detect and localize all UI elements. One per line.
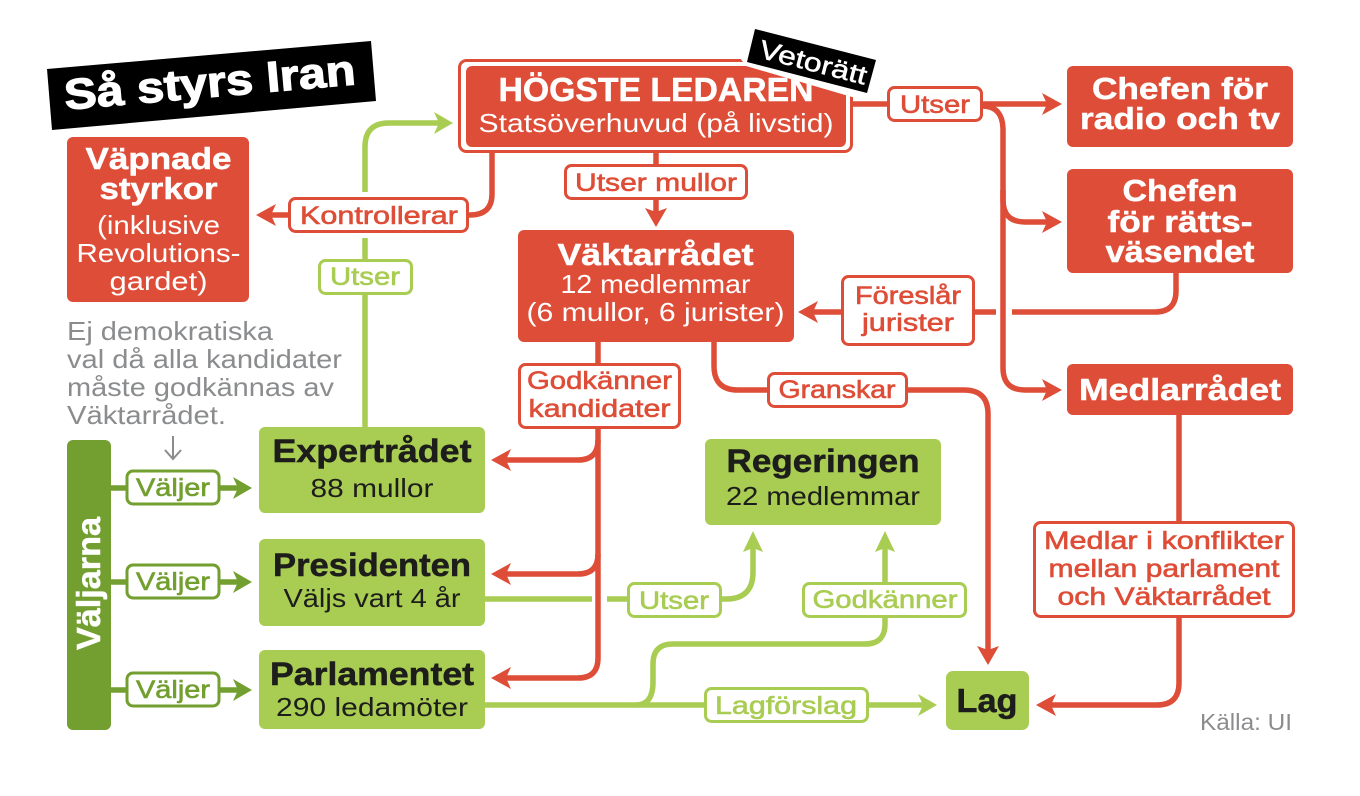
title: Så styrs Iran: [62, 46, 357, 120]
panel: Regeringen: Regeringen: [726, 443, 920, 479]
arrow and label: Väljer Presidenten: [111, 565, 252, 598]
label: Utser (Presidenten): [628, 584, 720, 616]
panel: Chefen för radio och tv: Chefen för: [1092, 71, 1268, 106]
label: Godkänner: Godkänner: [812, 586, 958, 614]
arrow: Presidenten utser regeringen: [485, 531, 763, 599]
panel: Högste ledaren: HÖGSTE LEDAREN: [498, 71, 814, 108]
panel: Lag: Lag: [956, 682, 1018, 719]
panel: Presidenten: Presidenten: [273, 547, 471, 583]
arrow and label: Väljer Expertrådet: [111, 471, 252, 504]
panel: Högste ledaren: [460, 60, 852, 152]
arrow: Utser medlarrådet: [1003, 190, 1062, 401]
label: Granskar: Granskar: [778, 376, 896, 404]
panel: Expertrådet: [259, 427, 485, 513]
label: Vetorätt: Vetorätt: [756, 34, 871, 91]
panel: Chefen för rättsväsendet: för rätts-: [1108, 204, 1252, 239]
label: Föreslår jurister: Föreslår: [855, 282, 961, 310]
source: Källa: UI: [1200, 709, 1292, 735]
panel: Chefen för radio och tv: radio och tv: [1080, 101, 1281, 136]
panel: Chefen för rättsväsendet: [1067, 169, 1293, 273]
label: Utser (Expertrådet): Utser: [330, 263, 400, 291]
panel: Väpnade styrkor: Revolutions-: [76, 238, 240, 268]
panel: Parlamentet: [259, 650, 485, 729]
panel: Parlamentet: 290 ledamöter: [276, 692, 468, 722]
label: Kontrollerar: [290, 198, 468, 232]
panel: Medlarrådet: [1067, 364, 1293, 415]
panel: Lag: [946, 671, 1029, 730]
panel: Expertrådet: Expertrådet: [272, 433, 472, 469]
panel: Väktarrådet: Väktarrådet: [558, 237, 754, 272]
label: Utser (Högste ledaren): Utser: [900, 91, 970, 119]
arrow: Expertrådet utser Högste ledaren: [365, 112, 453, 427]
panel: Väktarrådet: [518, 230, 794, 342]
panel: Presidenten: Väljs vart 4 år: [284, 583, 461, 613]
label: Medlar i konflikter: mellan parlament: [1048, 555, 1280, 583]
arrow and label: Väljer Presidenten: Väljer: [136, 568, 210, 596]
panel: Regeringen: [705, 439, 941, 525]
panel: Väpnade styrkor: (inklusive: [97, 210, 220, 240]
arrow: Föreslår jurister: [798, 273, 1176, 323]
label: Kontrollerar: Kontrollerar: [300, 202, 458, 230]
panel: Väpnade styrkor: Väpnade: [86, 141, 232, 176]
panel: Chefen för rättsväsendet: Chefen: [1122, 173, 1238, 208]
arrow: Lagförslag till lag: [485, 694, 937, 716]
arrow: Utser rättsväsendet: [982, 106, 1062, 233]
panel: Chefen för rättsväsendet: väsendet: [1106, 234, 1254, 269]
label: Medlar i konflikter: och Väktarrådet: [1058, 583, 1271, 611]
title: [47, 41, 376, 130]
arrow: Högste ledaren utser mullor: [645, 153, 667, 227]
arrow: Medlarrådet till lag: [1036, 415, 1179, 716]
arrow: Högste ledaren kontrollerar väpnade styrkor: [256, 153, 492, 226]
label: Lagförslag: [706, 688, 868, 722]
panel: Medlarrådet: Medlarrådet: [1079, 372, 1281, 407]
panel: Presidenten: [259, 539, 485, 626]
note: Ej demokratiska val: måste godkännas av: [67, 372, 334, 402]
label: Godkänner: [804, 584, 966, 616]
panel: Väktarrådet: 12 medlemmar: [560, 269, 751, 299]
panel: Regeringen: 22 medlemmar: [726, 481, 920, 511]
icon: grey arrow down: [165, 436, 181, 459]
arrow: Väktarrådet godkänner kandidater: [491, 342, 598, 689]
label: Vetorätt: [740, 29, 876, 97]
label: Utser (Expertrådet): [320, 260, 412, 294]
arrow and label: Väljer Parlamentet: [111, 673, 252, 706]
arrow: Utser radio och tv: [853, 93, 1062, 115]
arrow: Väktarrådet granskar lag: [714, 342, 999, 665]
panel: Väpnade styrkor: [67, 137, 249, 302]
label: Föreslår jurister: [842, 276, 974, 344]
arrow and label: Väljer Expertrådet: Väljer: [136, 474, 210, 502]
panel: Väpnade styrkor: gardet): [110, 266, 208, 296]
panel: Högste ledaren: Statsöverhuvud (på livstid): [478, 108, 834, 138]
panel: Väpnade styrkor: styrkor: [100, 171, 218, 206]
note: Ej demokratiska val: [67, 316, 342, 430]
label: Lagförslag: Lagförslag: [715, 692, 857, 720]
label: Utser mullor: Utser mullor: [575, 169, 737, 197]
label: Godkänner kandidater: kandidater: [528, 395, 670, 423]
note: Ej demokratiska val: Väktarrådet.: [67, 400, 226, 430]
panel: Expertrådet: 88 mullor: [310, 473, 434, 503]
label: Föreslår jurister: jurister: [861, 309, 954, 337]
label: Medlar i konflikter: [1034, 522, 1294, 616]
panel: Väljarna: [67, 440, 111, 730]
label: Granskar: [768, 374, 906, 406]
label: Utser (Presidenten): Utser: [639, 587, 709, 615]
label: Medlar i konflikter: Medlar i konflikter: [1044, 527, 1284, 555]
panel: Chefen för radio och tv: [1067, 66, 1293, 147]
arrow and label: Väljer Parlamentet: Väljer: [136, 676, 210, 704]
label: Godkänner kandidater: [520, 364, 680, 428]
panel: Väktarrådet: (6 mullor, 6 jurister): [526, 297, 784, 327]
panel: Parlamentet: Parlamentet: [270, 656, 474, 692]
label: Godkänner kandidater: Godkänner: [527, 367, 672, 395]
label: Utser mullor: [566, 166, 746, 198]
arrow: Parlamentet godkänner regeringen: [636, 531, 895, 705]
note: Ej demokratiska val: val då alla kandidater: [67, 344, 342, 374]
panel: Väljarna: Väljarna: [70, 516, 107, 650]
note: Ej demokratiska val: Ej demokratiska: [67, 316, 274, 346]
label: Utser (Högste ledaren): [888, 88, 982, 120]
